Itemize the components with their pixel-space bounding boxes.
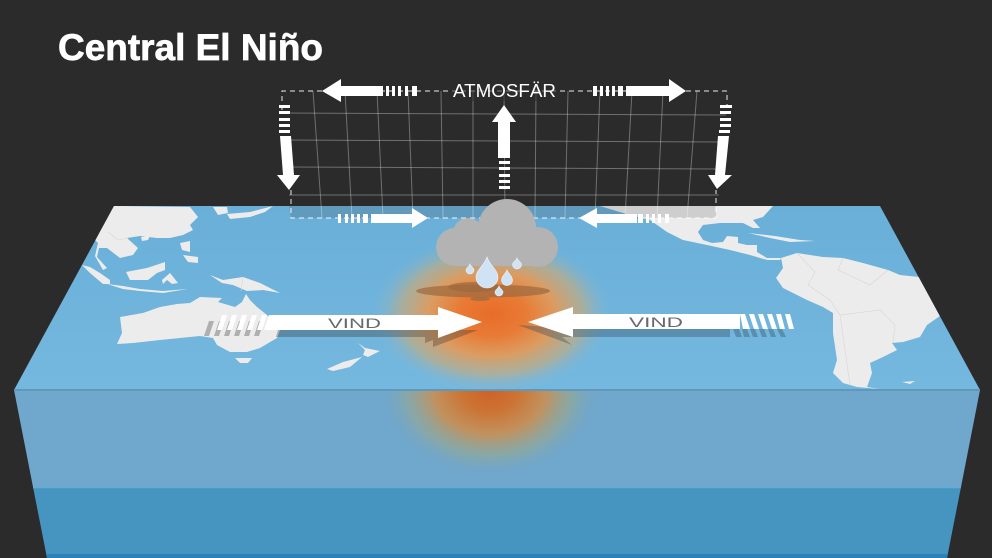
- world map land masses: [82, 206, 940, 389]
- land: Japan main island: [227, 206, 273, 219]
- land: Java: [107, 284, 188, 293]
- land: South America: [776, 253, 940, 389]
- arrow: upper left outflow: [322, 79, 417, 102]
- arrow body: [528, 307, 740, 337]
- warm water glow on surface: [381, 251, 603, 387]
- land: Asia: [90, 206, 198, 270]
- arrow body: [270, 307, 482, 338]
- land: New Zealand south: [327, 357, 362, 371]
- land: Hainan: [141, 236, 150, 241]
- surface front edge: [14, 389, 980, 391]
- label: ATMOSFÄR: ATMOSFÄR: [453, 81, 556, 101]
- cloud shadow on surface: [416, 282, 550, 301]
- arrow: lower right surface flow: [579, 208, 669, 228]
- panel: ocean block: [14, 206, 980, 558]
- wind arrow shadow left: [204, 321, 478, 347]
- land: Luzon: [180, 241, 190, 252]
- land: New Guinea: [210, 275, 280, 293]
- arrow: lower left surface flow: [338, 208, 428, 228]
- arrow: rising air: [492, 105, 516, 189]
- icon: rain cloud: [436, 199, 558, 296]
- arrow: left sinking air: [277, 105, 300, 190]
- land: North and Central America: [600, 206, 781, 260]
- panel: atmosphere circulation grid: [282, 91, 727, 218]
- land: Cuba and Antilles: [748, 233, 815, 242]
- land: Borneo: [126, 262, 165, 280]
- land: New Zealand north: [358, 343, 380, 357]
- ocean surface: [14, 206, 980, 390]
- land: Tasmania: [235, 358, 252, 363]
- rain drops: [466, 257, 522, 296]
- wind arrow shadow right: [518, 325, 786, 345]
- arrow: right sinking air: [708, 105, 732, 189]
- cloud body: [436, 199, 558, 267]
- deepest layer strip: [46, 554, 948, 558]
- layer boundary: [33, 486, 961, 488]
- land: Australia: [117, 294, 280, 352]
- land: Sulawesi: [162, 273, 178, 284]
- arrow tail stripes: [217, 315, 271, 330]
- label: VIND: VIND: [328, 315, 381, 331]
- land: Mindanao and Visayas: [183, 255, 198, 263]
- title: Central El Niño: [58, 27, 323, 68]
- wind arrow right: [528, 307, 794, 337]
- front face: deep ocean layer: [33, 487, 961, 558]
- land: Japan Hokkaido: [213, 207, 228, 215]
- arrow tail stripes: [740, 314, 794, 329]
- warm water plume in front face: [392, 391, 588, 468]
- land: Sumatra: [82, 265, 110, 284]
- front face: warm upper ocean layer: [14, 390, 980, 487]
- dashed boundary: [282, 91, 727, 218]
- land: Falkland Islands: [902, 381, 915, 384]
- grid lines: [283, 91, 726, 218]
- arrow: upper right outflow: [593, 79, 686, 102]
- wind arrow left: [217, 307, 482, 338]
- grid overlay on surface: [289, 206, 716, 218]
- country borders: [108, 232, 895, 385]
- label: VIND: VIND: [629, 314, 683, 330]
